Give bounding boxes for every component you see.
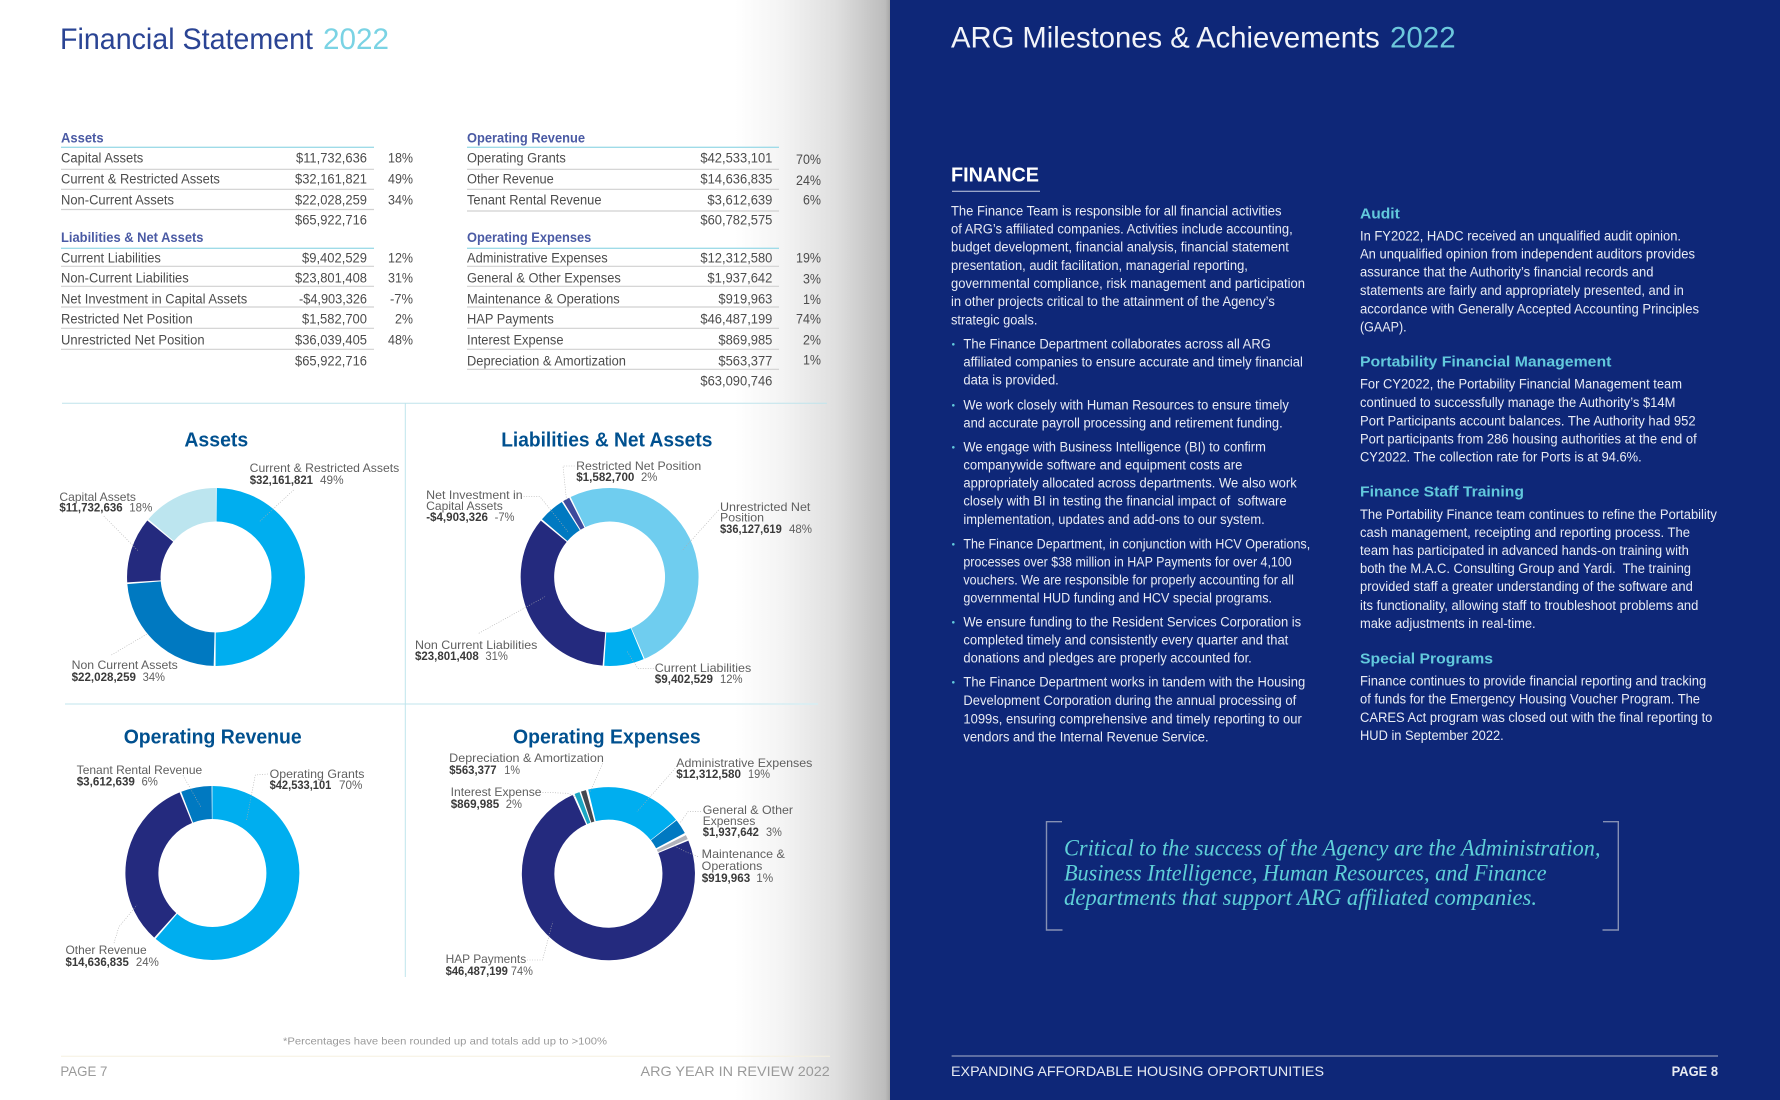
bullet: business intelligence: companywide software and equipment costs are bbox=[963, 457, 1242, 472]
text block: intro paragraph: governmental compliance, risk management and participation bbox=[951, 276, 1305, 291]
row: Unrestricted Net Position bbox=[61, 332, 413, 349]
title: Financial Statement 2022: 2022 bbox=[323, 23, 389, 56]
table: Operating Revenue bbox=[467, 131, 821, 228]
label: Current & Restricted Assets: 49% bbox=[320, 473, 344, 487]
total: Operating Revenue: $60,782,575 bbox=[700, 213, 772, 228]
row: Unrestricted Net Position: Unrestricted Net Position bbox=[61, 332, 205, 347]
leader lines: Operating Expenses bbox=[527, 763, 701, 960]
text block: intro paragraph: The Finance Team is responsible for all financial activities bbox=[951, 203, 1282, 218]
bullet: collaboration: data is provided. bbox=[963, 373, 1059, 388]
label: General & Other Expenses bbox=[703, 803, 793, 839]
row: Non-Current Assets: $22,028,259 bbox=[295, 193, 367, 208]
label: Depreciation & Amortization bbox=[449, 751, 604, 777]
row: Maintenance & Operations bbox=[467, 291, 821, 307]
row: Current & Restricted Assets bbox=[61, 172, 413, 189]
donut: Operating Expenses bbox=[510, 775, 707, 972]
label: Other Revenue bbox=[66, 943, 159, 969]
row: Operating Grants: 70% bbox=[796, 152, 821, 167]
label: Net Investment in Capital Assets: -7% bbox=[495, 510, 515, 524]
row: Net Investment in Capital Assets: -$4,903,326 bbox=[299, 291, 367, 306]
label: Net Investment in Capital Assets bbox=[426, 488, 523, 524]
label: Maintenance & Operations: Maintenance & bbox=[702, 847, 785, 861]
row: General & Other Expenses: 3% bbox=[803, 271, 821, 286]
panel: Assets chart bbox=[59, 430, 399, 684]
section: Audit: Audit bbox=[1360, 205, 1400, 222]
label: Current & Restricted Assets: $32,161,821 bbox=[250, 473, 313, 487]
row: General & Other Expenses bbox=[467, 270, 821, 286]
row: Depreciation & Amortization: $563,377 bbox=[718, 354, 772, 369]
section: Audit: (GAAP). bbox=[1360, 319, 1407, 334]
row: Administrative Expenses: $12,312,580 bbox=[700, 250, 772, 265]
label: HAP Payments: $46,487,199 bbox=[446, 964, 508, 978]
row: Maintenance & Operations: $919,963 bbox=[718, 291, 772, 306]
title: ARG Milestones & Achievements 2022: 2022 bbox=[1390, 22, 1456, 55]
bullet: housing development corporation: Development Corporation during the annual processing of bbox=[963, 693, 1296, 708]
row: Capital Assets: $11,732,636 bbox=[296, 151, 367, 166]
row: Operating Grants bbox=[467, 151, 821, 169]
row: Current Liabilities: Current Liabilities bbox=[61, 250, 161, 265]
bullet: HCV operations: The Finance Department, in conjunction with HCV Operations, bbox=[963, 536, 1310, 551]
label: Tenant Rental Revenue: $3,612,639 bbox=[77, 774, 135, 788]
row: HAP Payments bbox=[467, 312, 821, 328]
label: Capital Assets bbox=[59, 490, 153, 515]
label: Non Current Assets: Non Current Assets bbox=[72, 658, 178, 672]
label: Unrestricted Net Position: Position bbox=[720, 510, 764, 524]
row: Capital Assets: Capital Assets bbox=[61, 151, 144, 166]
bullet: HCV operations: governmental HUD funding and HCV special programs. bbox=[963, 590, 1272, 605]
title: ARG Milestones & Achievements 2022: ARG Milestones & Achievements bbox=[951, 22, 1380, 55]
row: Non-Current Assets bbox=[61, 193, 413, 210]
label: Tenant Rental Revenue: Tenant Rental Revenue bbox=[77, 763, 203, 777]
label: Net Investment in Capital Assets: Net Investment in bbox=[426, 488, 523, 502]
section: Audit: accordance with Generally Accepted Accounting Principles bbox=[1360, 301, 1699, 316]
panel: Operating Revenue chart bbox=[66, 726, 364, 973]
row: Current & Restricted Assets: $32,161,821 bbox=[295, 172, 367, 187]
label: Operating Grants: $42,533,101 bbox=[270, 778, 332, 792]
label: Restricted Net Position: Restricted Net Position bbox=[576, 459, 701, 473]
bullet: resident services: We ensure funding to the Resident Services Corporation is bbox=[963, 614, 1301, 629]
bullet: collaboration: affiliated companies to ensure accurate and timely financial bbox=[963, 354, 1303, 370]
heading: Liabilities & Net Assets: Liabilities & Net Assets bbox=[501, 430, 712, 452]
bullet: human resources: and accurate payroll processing and retirement funding. bbox=[963, 415, 1283, 430]
row: HAP Payments: HAP Payments bbox=[467, 312, 554, 327]
row: Interest Expense: Interest Expense bbox=[467, 332, 564, 347]
label: Capital Assets: $11,732,636 bbox=[59, 501, 123, 515]
section: Finance Staff Training: both the M.A.C. Consulting Group and Yardi. The training bbox=[1360, 561, 1691, 576]
row: General & Other Expenses: $1,937,642 bbox=[707, 270, 772, 285]
row: Depreciation & Amortization: 1% bbox=[803, 353, 821, 368]
row: Net Investment in Capital Assets: Net Investment in Capital Assets bbox=[61, 291, 247, 306]
section: Finance Staff Training: team has participated in advanced hands-on training with bbox=[1360, 543, 1689, 558]
bullet: business intelligence: implementation, updates and add-ons to our system. bbox=[963, 512, 1265, 527]
text block: intro paragraph bbox=[951, 203, 1305, 327]
row: Capital Assets bbox=[61, 151, 413, 169]
row: Tenant Rental Revenue: 6% bbox=[803, 193, 821, 208]
label: Maintenance & Operations: $919,963 bbox=[702, 871, 751, 885]
table: Operating Revenue: Operating Revenue bbox=[467, 131, 585, 146]
row: Other Revenue bbox=[467, 172, 821, 189]
label: Unrestricted Net Position: $36,127,619 bbox=[720, 522, 782, 536]
bullet: human resources bbox=[952, 397, 1289, 430]
heading: Assets: Assets bbox=[184, 430, 248, 452]
label: HAP Payments: 74% bbox=[511, 964, 533, 978]
label: Unrestricted Net Position: 48% bbox=[789, 522, 812, 536]
footer: left page bbox=[60, 1056, 830, 1079]
text block: intro paragraph: of ARG’s affiliated companies. Activities include accounting, bbox=[951, 221, 1293, 236]
bullet: housing development corporation: vendors and the Internal Revenue Service. bbox=[963, 729, 1209, 744]
panel: Operating Expenses chart bbox=[446, 726, 812, 978]
bullet: resident services: donations and pledges are properly accounted for. bbox=[963, 650, 1252, 665]
row: Interest Expense: $869,985 bbox=[718, 332, 772, 347]
label: Administrative Expenses: 19% bbox=[748, 767, 770, 781]
panel: Liabilities & Net Assets chart bbox=[415, 430, 812, 686]
row: Operating Grants: Operating Grants bbox=[467, 151, 566, 166]
callout: quote with brackets: Business Intelligence, Human Resources, and Finance bbox=[1064, 861, 1547, 886]
leader lines: Assets bbox=[104, 490, 294, 655]
label: Current Liabilities: 12% bbox=[720, 672, 743, 686]
row: Maintenance & Operations: 1% bbox=[803, 292, 821, 307]
row: Administrative Expenses bbox=[467, 250, 821, 266]
label: Non Current Assets bbox=[72, 658, 178, 684]
bullet: housing development corporation: 1099s, ensuring comprehensive and timely reporting to our bbox=[963, 711, 1302, 726]
table: Assets bbox=[61, 131, 413, 228]
table: Liabilities & Net Assets bbox=[61, 230, 413, 369]
label: Capital Assets: 18% bbox=[129, 501, 153, 515]
bullet: collaboration bbox=[952, 336, 1303, 388]
row: Tenant Rental Revenue: $3,612,639 bbox=[707, 193, 772, 208]
label: Unrestricted Net Position: Unrestricted Net bbox=[720, 500, 811, 514]
section: Portability Financial Management: For CY2022, the Portability Financial Management team bbox=[1360, 376, 1682, 391]
table: Operating Expenses bbox=[467, 230, 821, 389]
total: Assets: $65,922,716 bbox=[295, 213, 367, 228]
section: Special Programs: Finance continues to provide financial reporting and tracking bbox=[1360, 673, 1706, 688]
section: Portability Financial Management bbox=[1360, 354, 1697, 464]
donut: Operating Revenue bbox=[113, 773, 312, 973]
section: Special Programs: CARES Act program was closed out with the final reporting to bbox=[1360, 710, 1712, 725]
heading: FINANCE: FINANCE bbox=[951, 165, 1039, 187]
row: Capital Assets: 18% bbox=[388, 151, 413, 166]
row: Maintenance & Operations: Maintenance & Operations bbox=[467, 291, 620, 306]
section: Finance Staff Training: Finance Staff Training bbox=[1360, 484, 1524, 501]
label: Current & Restricted Assets: Current & Restricted Assets bbox=[250, 461, 399, 475]
table: Assets: Assets bbox=[61, 131, 104, 146]
row: Restricted Net Position: 2% bbox=[395, 312, 413, 327]
row: HAP Payments: $46,487,199 bbox=[700, 312, 772, 327]
row: Administrative Expenses: Administrative Expenses bbox=[467, 250, 608, 265]
label: Other Revenue: 24% bbox=[136, 955, 159, 969]
row: Depreciation & Amortization: Depreciation & Amortization bbox=[467, 354, 626, 369]
section: Audit bbox=[1360, 205, 1699, 334]
label: Current Liabilities: $9,402,529 bbox=[655, 672, 713, 686]
donut: Liabilities & Net Assets bbox=[508, 475, 711, 679]
label: Restricted Net Position bbox=[576, 459, 701, 484]
label: HAP Payments bbox=[446, 952, 533, 978]
section: Finance Staff Training: make adjustments in real-time. bbox=[1360, 616, 1536, 631]
section: Special Programs: Special Programs bbox=[1360, 650, 1493, 667]
callout: quote with brackets: departments that support ARG affiliated companies. bbox=[1064, 885, 1537, 910]
label: Restricted Net Position: $1,582,700 bbox=[576, 470, 635, 484]
row: Operating Grants: $42,533,101 bbox=[700, 151, 772, 166]
row: Unrestricted Net Position: 48% bbox=[388, 332, 413, 347]
heading: Operating Revenue: Operating Revenue bbox=[124, 726, 302, 748]
title: Financial Statement 2022: Financial Statement bbox=[60, 23, 313, 56]
row: Other Revenue: 24% bbox=[796, 173, 821, 188]
label: Current Liabilities: Current Liabilities bbox=[655, 661, 751, 675]
label: Unrestricted Net Position bbox=[720, 500, 812, 536]
label: Non Current Assets: $22,028,259 bbox=[72, 670, 136, 684]
section: Portability Financial Management: continued to successfully manage the Authority’s $14M bbox=[1360, 395, 1675, 410]
row: Restricted Net Position: Restricted Net Position bbox=[61, 312, 193, 327]
row: Non-Current Liabilities: 31% bbox=[388, 270, 413, 285]
label: Net Investment in Capital Assets: -$4,903,326 bbox=[426, 510, 488, 524]
row: Current Liabilities bbox=[61, 250, 413, 266]
label: Non Current Assets: 34% bbox=[143, 670, 165, 684]
section: Portability Financial Management: CY2022. The collection rate for Ports is at 94.6%. bbox=[1360, 449, 1642, 464]
row: Net Investment in Capital Assets bbox=[61, 291, 413, 307]
bullet: business intelligence: We engage with Business Intelligence (BI) to confirm bbox=[963, 439, 1266, 454]
bullet: business intelligence bbox=[952, 439, 1297, 527]
row: Unrestricted Net Position: $36,039,405 bbox=[295, 332, 367, 347]
bullet: HCV operations bbox=[952, 536, 1310, 605]
bullet: business intelligence: closely with BI in testing the financial impact of software bbox=[963, 493, 1287, 508]
bullet: HCV operations: processes over $38 million in HAP Payments for over 4,100 bbox=[963, 554, 1292, 569]
label: Administrative Expenses: $12,312,580 bbox=[676, 767, 741, 781]
label: Interest Expense: $869,985 bbox=[451, 797, 500, 811]
section: Audit: assurance that the Authority’s financial records and bbox=[1360, 264, 1654, 279]
row: Tenant Rental Revenue: Tenant Rental Revenue bbox=[467, 193, 602, 208]
row: Depreciation & Amortization bbox=[467, 353, 821, 369]
row: Tenant Rental Revenue bbox=[467, 193, 821, 211]
label: Depreciation & Amortization: 1% bbox=[504, 763, 520, 777]
footer: left page: PAGE 7 bbox=[60, 1063, 108, 1079]
total: Liabilities & Net Assets: $65,922,716 bbox=[295, 354, 367, 369]
row: Current & Restricted Assets: 49% bbox=[388, 172, 413, 187]
row: General & Other Expenses: General & Other Expenses bbox=[467, 270, 621, 285]
bullet: collaboration: The Finance Department collaborates across all ARG bbox=[963, 336, 1271, 351]
label: Administrative Expenses bbox=[676, 756, 812, 781]
bullet: HCV operations: vouchers. We are responsible for properly accounting for all bbox=[963, 572, 1294, 587]
footer: left page: ARG YEAR IN REVIEW 2022 bbox=[640, 1063, 830, 1079]
section: Audit: In FY2022, HADC received an unqualified audit opinion. bbox=[1360, 228, 1681, 243]
label: Non Current Liabilities: Non Current Liabilities bbox=[415, 638, 537, 652]
total: Operating Expenses: $63,090,746 bbox=[700, 374, 772, 389]
label: Tenant Rental Revenue: 6% bbox=[142, 774, 158, 788]
row: Current Liabilities: $9,402,529 bbox=[302, 250, 367, 265]
label: HAP Payments: HAP Payments bbox=[446, 952, 526, 966]
footer: right page: EXPANDING AFFORDABLE HOUSING OPPORTUNITIES bbox=[951, 1063, 1324, 1079]
label: General & Other Expenses: Expenses bbox=[703, 814, 755, 828]
table: Liabilities & Net Assets: Liabilities & Net Assets bbox=[61, 230, 204, 245]
label: Operating Grants: Operating Grants bbox=[270, 767, 364, 781]
label: Maintenance & Operations: 1% bbox=[756, 871, 774, 885]
row: Non-Current Assets: 34% bbox=[388, 193, 413, 208]
text block: intro paragraph: strategic goals. bbox=[951, 312, 1037, 327]
bullet: human resources: We work closely with Human Resources to ensure timely bbox=[963, 397, 1289, 412]
label: Non Current Liabilities: $23,801,408 bbox=[415, 649, 479, 663]
row: Non-Current Liabilities: Non-Current Liabilities bbox=[61, 270, 189, 285]
row: Non-Current Liabilities: $23,801,408 bbox=[295, 270, 367, 285]
row: Other Revenue: Other Revenue bbox=[467, 172, 554, 187]
text block: intro paragraph: presentation, audit facilitation, managerial reporting, bbox=[951, 258, 1248, 273]
footer: right page bbox=[951, 1056, 1718, 1079]
label: Other Revenue: Other Revenue bbox=[66, 943, 147, 957]
callout: quote with brackets bbox=[1046, 822, 1618, 930]
section: Finance Staff Training: provided staff a greater understanding of the software and bbox=[1360, 579, 1693, 594]
text block: intro paragraph: in other projects critical to the attainment of the Agency’s bbox=[951, 294, 1275, 309]
text block: intro paragraph: budget development, financial analysis, financial statement bbox=[951, 240, 1289, 255]
label: Interest Expense: 2% bbox=[506, 797, 522, 811]
label: Operating Grants bbox=[270, 767, 364, 792]
bullet: housing development corporation bbox=[952, 674, 1305, 744]
leader lines: Liabilities bbox=[479, 466, 719, 669]
section: Portability Financial Management: Port participants from 286 housing authorities at the end of bbox=[1360, 431, 1697, 446]
row: Non-Current Liabilities bbox=[61, 270, 413, 286]
section: Special Programs bbox=[1360, 650, 1712, 743]
label: Restricted Net Position: 2% bbox=[641, 470, 658, 484]
panel: right page background bbox=[890, 0, 1780, 1100]
label: Maintenance & Operations bbox=[702, 847, 785, 885]
panel: left page background bbox=[0, 0, 890, 1100]
row: Non-Current Assets: Non-Current Assets bbox=[61, 193, 174, 208]
table: Operating Expenses: Operating Expenses bbox=[467, 230, 591, 245]
section: Finance Staff Training bbox=[1360, 484, 1717, 631]
row: Restricted Net Position bbox=[61, 312, 413, 328]
section: Portability Financial Management: Portability Financial Management bbox=[1360, 354, 1611, 371]
label: Other Revenue: $14,636,835 bbox=[66, 955, 129, 969]
footer: right page: PAGE 8 bbox=[1672, 1063, 1718, 1079]
callout: quote with brackets: Critical to the success of the Agency are the Administration, bbox=[1064, 836, 1600, 861]
section: Finance Staff Training: The Portability Finance team continues to refine the Portability bbox=[1360, 507, 1717, 522]
row: HAP Payments: 74% bbox=[796, 312, 821, 327]
section: Finance Staff Training: cash management, receipting and reporting process. The bbox=[1360, 525, 1690, 540]
label: Non Current Liabilities: 31% bbox=[485, 649, 508, 663]
label: General & Other Expenses: General & Other bbox=[703, 803, 793, 817]
label: General & Other Expenses: $1,937,642 bbox=[703, 825, 759, 839]
section: Audit: statements are fairly and appropriately presented, and in bbox=[1360, 283, 1684, 298]
label: Operating Grants: 70% bbox=[339, 778, 363, 792]
row: Interest Expense: 2% bbox=[803, 332, 821, 347]
label: Current Liabilities bbox=[655, 661, 751, 686]
label: Interest Expense: Interest Expense bbox=[451, 785, 542, 799]
row: Current Liabilities: 12% bbox=[388, 250, 413, 265]
row: Interest Expense bbox=[467, 332, 821, 349]
row: Restricted Net Position: $1,582,700 bbox=[302, 312, 367, 327]
leader lines: Operating Revenue bbox=[114, 774, 268, 943]
label: Interest Expense bbox=[451, 785, 542, 811]
label: General & Other Expenses: 3% bbox=[766, 825, 782, 839]
label: Depreciation & Amortization: Depreciation & Amortization bbox=[449, 751, 604, 765]
label: Tenant Rental Revenue bbox=[77, 763, 203, 788]
label: Current & Restricted Assets bbox=[250, 461, 399, 487]
label: Capital Assets: Capital Assets bbox=[59, 490, 136, 504]
label: Maintenance & Operations: Operations bbox=[702, 859, 762, 873]
section: Portability Financial Management: Port Participants account balances. The Authority had 952 bbox=[1360, 413, 1696, 428]
section: Special Programs: HUD in September 2022. bbox=[1360, 728, 1504, 743]
footnote: *Percentages have been rounded up and totals add up to >100% bbox=[283, 1036, 607, 1048]
donut: Assets bbox=[114, 475, 318, 679]
label: Non Current Liabilities bbox=[415, 638, 537, 663]
section: Audit: An unqualified opinion from independent auditors provides bbox=[1360, 246, 1695, 261]
row: Other Revenue: $14,636,835 bbox=[700, 172, 772, 187]
row: Administrative Expenses: 19% bbox=[796, 250, 821, 265]
label: Depreciation & Amortization: $563,377 bbox=[449, 763, 497, 777]
section: Finance Staff Training: its functionality, allowing staff to troubleshoot problems and bbox=[1360, 598, 1698, 613]
bullet: resident services: completed timely and consistently every quarter and that bbox=[963, 632, 1289, 647]
bullet: business intelligence: appropriately allocated across departments. We also work bbox=[963, 475, 1297, 490]
heading: Operating Expenses: Operating Expenses bbox=[513, 726, 701, 748]
bullet: housing development corporation: The Finance Department works in tandem with the Housing bbox=[963, 674, 1305, 689]
section: Special Programs: of funds for the Emergency Housing Voucher Program. The bbox=[1360, 691, 1700, 706]
row: Net Investment in Capital Assets: -7% bbox=[390, 291, 413, 306]
bullet: resident services bbox=[952, 614, 1301, 665]
row: Current & Restricted Assets: Current & Restricted Assets bbox=[61, 172, 220, 187]
label: Net Investment in Capital Assets: Capital Assets bbox=[426, 499, 503, 513]
label: Administrative Expenses: Administrative Expenses bbox=[676, 756, 812, 770]
